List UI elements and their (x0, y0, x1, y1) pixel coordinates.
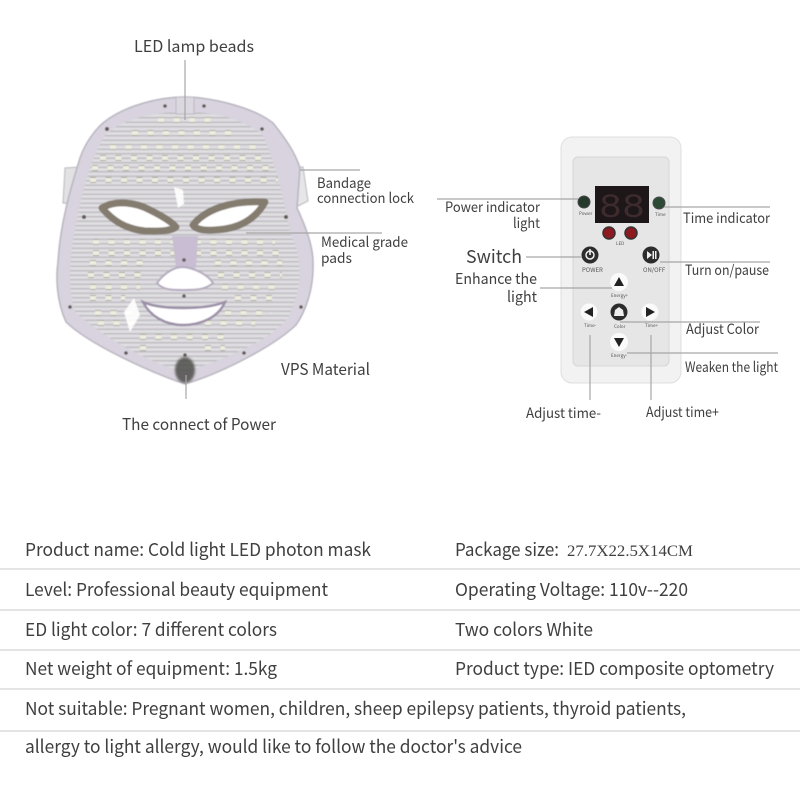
callout: switch: Switch (466, 243, 522, 269)
button: time plus: Time+ (645, 322, 659, 329)
indicator: time (653, 197, 666, 218)
callout: LED lamp beads: LED lamp beads (134, 33, 254, 57)
callout: power indicator light: Power indicator (445, 197, 541, 217)
callout: switch (466, 243, 582, 269)
callout: VPS material: VPS Material (281, 356, 370, 380)
callout: turn on/pause: Turn on/pause (685, 260, 769, 280)
button: power (582, 246, 603, 274)
photo: LED face mask (57, 97, 313, 384)
indicator: power (578, 196, 593, 217)
callout: bandage connection lock: Bandage (317, 173, 371, 193)
button: energy up (610, 273, 629, 299)
indicator: power: Power (579, 211, 593, 217)
callout: weaken the light: Weaken the light (685, 357, 779, 377)
spec: product type: Product type: IED composite optometry (455, 655, 775, 681)
spec: level: Level: Professional beauty equipment (25, 576, 328, 602)
nose opening (157, 267, 213, 290)
mounting screws (68, 104, 303, 357)
callout: adjust colour (620, 319, 760, 339)
mask side straps (63, 167, 308, 206)
mask inner ribbed plate with LED beads (70, 112, 300, 383)
button: power: POWER (582, 265, 603, 274)
button: energy down (610, 333, 628, 359)
callout: bandage connection lock: connection lock (317, 188, 414, 208)
spec: not suitable: Not suitable: Pregnant women, children, sheep epilepsy patients, thyroid patients, (25, 695, 686, 721)
spec: package size: Package size: (455, 536, 559, 562)
mouth opening (143, 302, 225, 325)
callout: LED lamp beads (134, 33, 254, 120)
button: time minus (580, 304, 598, 329)
button: on/off: ON/OFF (643, 265, 666, 274)
spec: advice: allergy to light allergy, would like to follow the doctor's advice (25, 733, 522, 759)
callout: bandage connection lock (300, 170, 414, 208)
remote body (561, 137, 681, 383)
button: energy down: Energy- (611, 353, 628, 359)
spec: package size (455, 536, 693, 562)
callout: medical grade pads: pads (321, 248, 352, 268)
button: on/off (642, 246, 666, 274)
callout: enhance the light (455, 268, 612, 307)
indicator: time: Time (655, 211, 666, 218)
callout: adjust time plus (646, 335, 719, 422)
spec: product name: Product name: Cold light LED photon mask (25, 536, 371, 562)
spec: operating voltage: Operating Voltage: 110v--220 (455, 576, 688, 602)
button: colour (610, 304, 628, 330)
red LEDs (603, 227, 637, 247)
mask shell (57, 97, 313, 384)
button: time plus (642, 304, 659, 329)
mask centre tab (176, 97, 194, 114)
callout: adjust colour: Adjust Color (686, 319, 760, 339)
callout: power indicator light (437, 197, 578, 233)
callout: enhance the light: light (507, 286, 537, 307)
spec: LED light colour: ED light color: 7 different colors (25, 616, 277, 642)
callout: connect of power: The connect of Power (122, 411, 277, 435)
callout: medical grade pads: Medical grade (321, 232, 408, 252)
callout: power indicator light: light (513, 213, 541, 233)
red LEDs: LED (616, 241, 624, 247)
callout: enhance the light: Enhance the (455, 268, 537, 289)
button: time minus: Time- (584, 322, 597, 329)
LED display: 88 (599, 190, 645, 228)
photo: remote control (561, 137, 681, 383)
specification table (0, 536, 800, 759)
callout: adjust time minus: Adjust time- (526, 403, 601, 423)
eye openings with pads (102, 202, 265, 231)
spec: two colours: Two colors White (455, 616, 593, 642)
remote face panel (573, 157, 669, 366)
callout: adjust time minus (526, 335, 601, 423)
callout: time indicator: Time indicator (683, 208, 771, 228)
button: colour: Color (614, 324, 626, 330)
LED display (595, 186, 649, 228)
callout: adjust time plus: Adjust time+ (646, 402, 719, 422)
callout: medical grade pads (246, 232, 408, 268)
spec: net weight: Net weight of equipment: 1.5kg (25, 655, 277, 681)
button: energy up: Energy+ (611, 293, 629, 299)
spec: package size: 27.7X22.5X14CM (567, 543, 693, 560)
